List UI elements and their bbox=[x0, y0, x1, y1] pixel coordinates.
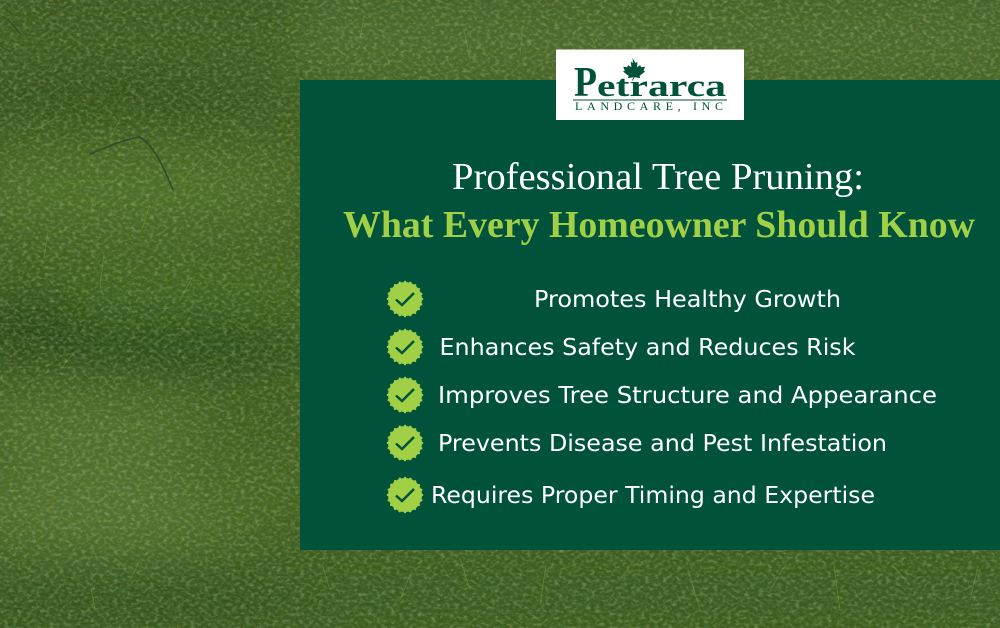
logo tagline: LANDCARE, INC bbox=[575, 99, 723, 113]
logo bbox=[556, 50, 744, 120]
icon: check badge 5 bbox=[388, 478, 422, 512]
list item 4: Prevents Disease and Pest Infestation bbox=[438, 431, 887, 457]
list item 5: Requires Proper Timing and Expertise bbox=[431, 483, 875, 509]
icon: check badge 3 bbox=[388, 378, 422, 412]
icon: check badge 4 bbox=[388, 426, 422, 460]
icon: maple leaf bbox=[623, 58, 645, 81]
logo rule bbox=[573, 100, 727, 101]
icon: check badge 1 bbox=[388, 282, 422, 316]
title: line one: Professional Tree Pruning: bbox=[452, 156, 864, 198]
list item 2: Enhances Safety and Reduces Risk bbox=[440, 335, 856, 361]
panel: green content panel bbox=[300, 80, 1000, 550]
icon: check badge 2 bbox=[388, 330, 422, 364]
title: line two: What Every Homeowner Should Know bbox=[343, 204, 976, 246]
logo wordmark initial: P bbox=[574, 60, 597, 106]
list item 1: Promotes Healthy Growth bbox=[534, 287, 841, 313]
list item 3: Improves Tree Structure and Appearance bbox=[438, 383, 937, 409]
logo wordmark: etrarca bbox=[597, 68, 727, 103]
